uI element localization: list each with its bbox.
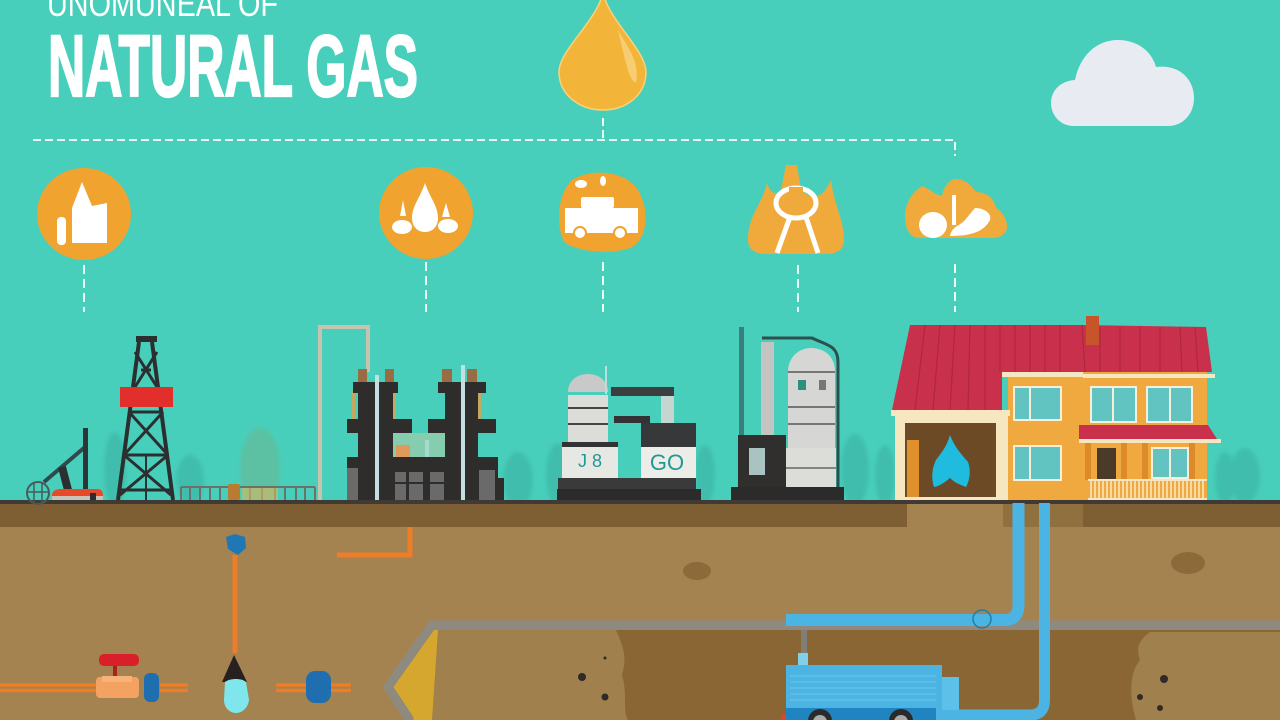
icon: flame storage: [748, 165, 844, 254]
processing tower: [731, 327, 844, 500]
garage: [895, 416, 1008, 500]
pipe flange right: [306, 671, 331, 703]
blue pipes: [786, 503, 1044, 715]
rock strata line: [388, 625, 1280, 720]
title: [47, 0, 418, 115]
tall pipe frame: [320, 327, 368, 500]
icon: golden drop: [559, 0, 646, 110]
gas truck: [782, 630, 959, 720]
awning: [1079, 425, 1217, 439]
refinery: [347, 365, 504, 500]
dashed connectors: [84, 262, 955, 312]
icon: blue flame: [932, 435, 970, 487]
icon: home supply cloud: [905, 179, 1007, 238]
house: [891, 316, 1221, 500]
oil derrick: [118, 336, 173, 500]
dashed distribution line: [33, 118, 955, 156]
background tree silhouettes: [104, 428, 1260, 508]
storage tanks: [557, 366, 701, 500]
pipe fitting: top flange: [226, 534, 246, 555]
pipe flange left: [144, 673, 159, 702]
fascia trim: [891, 372, 1215, 416]
chimney: [1086, 316, 1099, 345]
nozzle and gas bulb: [222, 655, 249, 713]
windows: [1014, 387, 1192, 480]
orange pipes: [0, 527, 410, 690]
porch railing: [1088, 479, 1207, 500]
title: NATURAL GAS: [48, 18, 418, 115]
icon: extraction badge: [37, 168, 131, 260]
valve: [96, 654, 139, 698]
fence: [181, 484, 315, 500]
icon: cloud: [1051, 40, 1194, 126]
icon: processing badge: [379, 167, 473, 259]
ground: [0, 500, 1280, 720]
awning trim: [1079, 439, 1221, 443]
storage tanks: J 8: [578, 451, 602, 471]
soil rocks and pebbles: [578, 552, 1205, 711]
roof seams: [915, 325, 1198, 410]
porch posts: [1088, 443, 1192, 480]
storage tanks: GO: [650, 450, 684, 475]
porch door: [1097, 448, 1116, 480]
pump jack: [27, 428, 103, 504]
house roof: [892, 325, 1212, 410]
house walls: [1008, 372, 1207, 500]
icon: transport badge: [559, 173, 646, 252]
